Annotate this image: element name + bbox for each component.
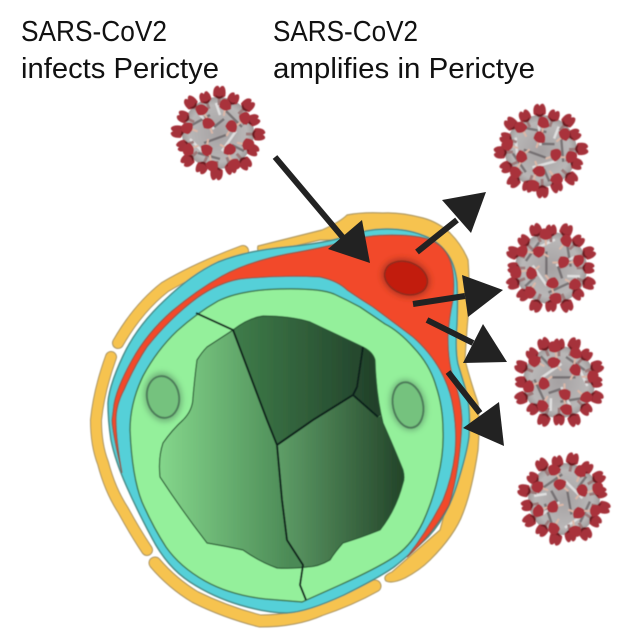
arrow: release 2 — [413, 275, 503, 317]
heading: SARS-CoV2 amplifies in Perictye — [273, 16, 535, 85]
heading: SARS-CoV2 amplifies in Perictye: SARS-CoV2 — [273, 16, 418, 48]
heading: SARS-CoV2 amplifies in Perictye: amplifies in Perictye — [273, 53, 535, 85]
lumen cell: right — [277, 396, 404, 568]
virus: released particle 1 — [474, 84, 608, 218]
lumen cell: left — [160, 330, 303, 568]
arrow: release 4 — [448, 372, 504, 446]
nucleus: pericyte — [376, 252, 436, 304]
blood vessel cross-section — [96, 213, 479, 621]
astrocyte endfoot: bottom — [155, 563, 375, 621]
heading: SARS-CoV2 infects Perictye: SARS-CoV2 — [21, 16, 167, 48]
arrow: virus entering pericyte — [275, 157, 370, 263]
lumen cell: top — [233, 316, 382, 444]
virus: released particle 2 — [490, 207, 612, 329]
nucleus: left endothelial cell — [140, 369, 186, 425]
lumen: endothelial cells — [160, 316, 404, 568]
arrow: release 3 — [427, 320, 507, 363]
virus: infecting particle — [171, 86, 265, 180]
infected pericyte: red layer — [112, 235, 462, 557]
astrocyte endfoot: upper left — [118, 251, 243, 343]
pericyte basement membrane: cyan layer — [108, 229, 470, 613]
heading: SARS-CoV2 infects Perictye: infects Perictye — [21, 53, 219, 85]
astrocyte endfoot: top right — [258, 213, 479, 582]
virus: released particle 3 — [498, 321, 620, 443]
lumen outline — [159, 316, 404, 568]
arrow: release 1 — [417, 192, 486, 252]
nucleus: right endothelial cell — [385, 376, 431, 434]
endothelial layer: light green — [130, 289, 443, 602]
endothelial cell junctions — [196, 313, 378, 600]
astrocyte endfoot: left — [96, 357, 147, 550]
heading: SARS-CoV2 infects Perictye — [21, 16, 219, 85]
virus: released particle 4 — [509, 444, 619, 554]
